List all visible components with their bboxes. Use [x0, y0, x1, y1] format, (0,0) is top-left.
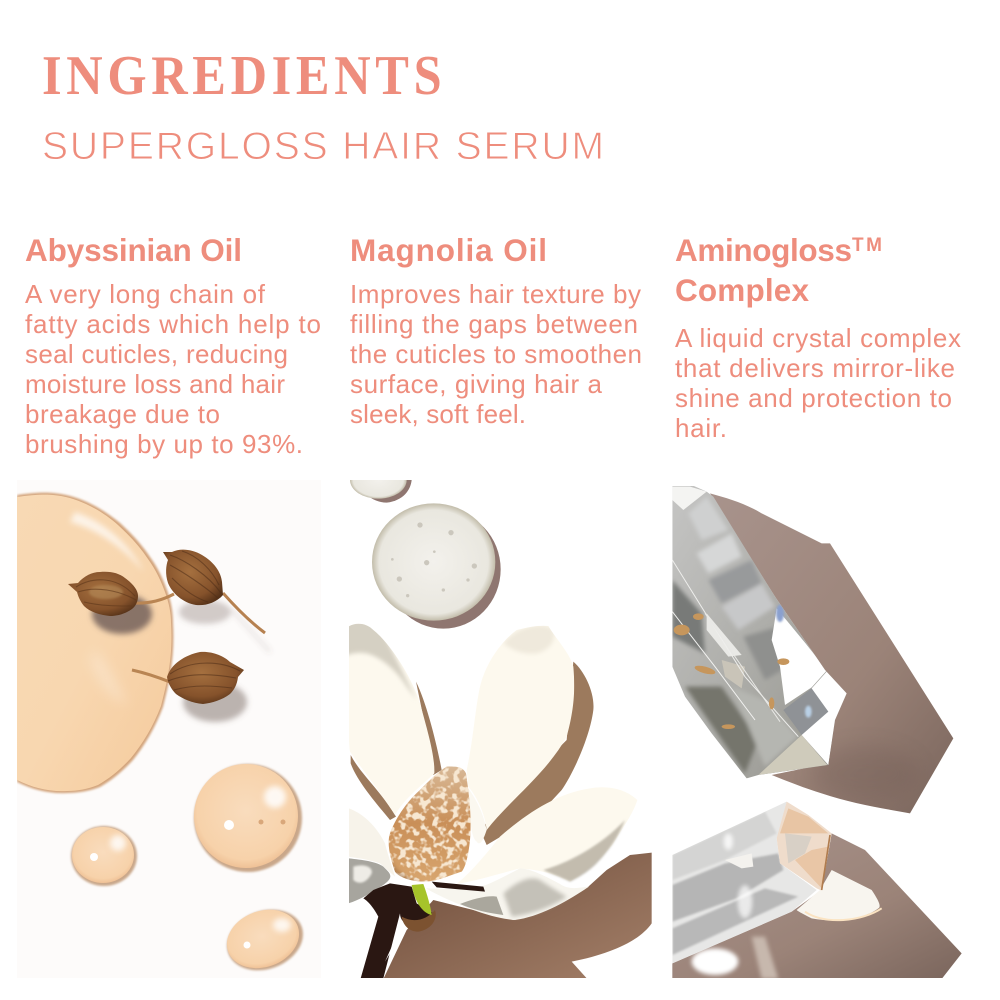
petal: upper right	[467, 626, 574, 830]
crystal: lower	[672, 802, 816, 964]
petal: lower silver	[426, 868, 589, 920]
text block: Aminogloss description: A liquid crystal complex	[675, 323, 961, 353]
subtitle: SUPERGLOSS HAIR SERUM	[42, 125, 604, 168]
oil droplet: small	[71, 826, 137, 886]
oil droplet: bottom right	[226, 908, 304, 972]
text block: Magnolia Oil description: Improves hair texture by	[350, 279, 641, 309]
seed: top right	[163, 550, 265, 633]
magnolia stem	[361, 883, 436, 978]
heading: Aminogloss TM Complex: TM	[852, 235, 882, 256]
petal: upper left	[349, 624, 434, 815]
panel: abyssinian oil image	[17, 480, 321, 981]
text block: Abyssinian Oil description	[25, 279, 321, 459]
text block: Aminogloss description: that delivers mirror-like	[675, 353, 955, 383]
text block: Abyssinian Oil description: moisture loss and hair	[25, 369, 285, 399]
column: Aminogloss Complex text	[675, 232, 961, 443]
text block: Abyssinian Oil description: A very long chain of	[25, 279, 266, 309]
text block: Abyssinian Oil description: brushing by up to 93%.	[25, 429, 303, 459]
heading: Aminogloss TM Complex: Aminogloss	[675, 232, 852, 268]
petal: lower right	[457, 787, 637, 884]
text block: Abyssinian Oil description: fatty acids which help to	[25, 309, 321, 339]
text block: Abyssinian Oil description: seal cuticles, reducing	[25, 339, 288, 369]
text block: Magnolia Oil description	[350, 279, 642, 429]
title: INGREDIENTS	[42, 45, 442, 107]
text block: Magnolia Oil description: sleek, soft feel.	[350, 399, 526, 429]
magnolia shadows	[351, 662, 594, 845]
crystal shadow: lower	[672, 833, 962, 979]
text block: Magnolia Oil description: the cuticles to smoothen	[350, 339, 642, 369]
petal: lower left	[348, 808, 395, 903]
text block: Aminogloss description: shine and protection to	[675, 383, 952, 413]
text block: Magnolia Oil description: surface, giving hair a	[350, 369, 603, 399]
heading: Abyssinian Oil: Abyssinian Oil	[25, 232, 242, 268]
crystal tip: peach	[777, 802, 832, 891]
column: Magnolia Oil text	[350, 232, 642, 429]
panel: crystal image	[665, 480, 962, 979]
oil droplet: large	[194, 764, 302, 872]
crystal: upper	[665, 480, 852, 780]
text block: Aminogloss description	[675, 323, 961, 443]
big flower shadow	[383, 853, 652, 979]
text block: Aminogloss description: hair.	[675, 413, 727, 443]
serum drop: top	[350, 480, 412, 503]
green pistil	[412, 884, 432, 915]
seed: left	[68, 572, 174, 616]
heading: Magnolia Oil: Magnolia Oil	[350, 232, 547, 268]
oil swatch	[17, 493, 173, 793]
heading: Aminogloss TM Complex: Complex	[675, 272, 809, 308]
crystal shadow: upper	[710, 493, 953, 813]
seed: bottom	[132, 652, 244, 704]
magnolia dark shadow line	[432, 882, 485, 892]
serum drop: large	[372, 503, 501, 629]
magnolia cone	[388, 766, 471, 882]
text block: Magnolia Oil description: filling the gaps between	[350, 309, 638, 339]
column: Abyssinian Oil text	[25, 232, 321, 459]
text block: Abyssinian Oil description: breakage due to	[25, 399, 220, 429]
panel: magnolia image	[340, 461, 652, 979]
petal: inner center	[468, 788, 487, 843]
seed shadows	[92, 594, 270, 722]
heading: Aminogloss TM Complex	[675, 232, 882, 308]
